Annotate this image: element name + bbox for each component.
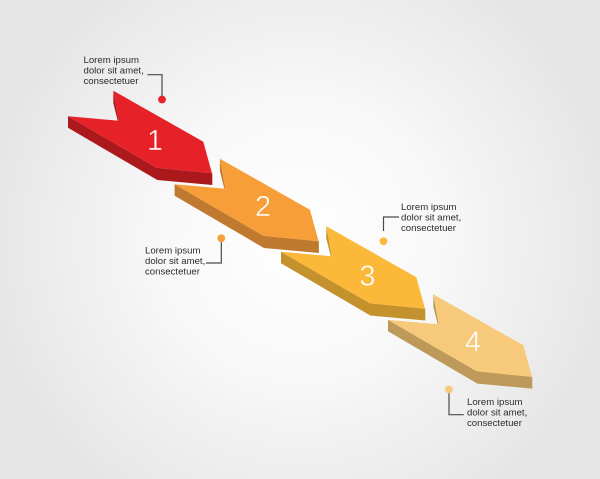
arrow 4 [388,294,532,389]
callout 1: dolor sit amet, [84,66,144,76]
callout 4: Lorem ipsum [467,397,522,408]
callout 1: Lorem ipsum [84,55,139,66]
callout 2: Lorem ipsum [145,246,200,256]
callout 3: consectetuer [401,223,457,234]
callout 4: consectetuer [467,418,523,429]
callout 4: dolor sit amet, [467,408,527,418]
arrow 1 [68,91,212,185]
callout 2 [145,234,225,278]
number 1: 1 [147,125,163,157]
callout 1 [84,55,166,103]
callout 2: dolor sit amet, [145,256,205,267]
arrow 2 [175,159,319,253]
callout 4 [445,386,527,429]
callout 2: consectetuer [145,266,201,278]
callout 3 [380,202,461,245]
callout 1: consectetuer [84,76,139,87]
number 4: 4 [465,327,481,359]
arrow 3 [281,226,425,320]
callout 3: dolor sit amet, [401,212,461,224]
callout 3: Lorem ipsum [401,202,456,213]
number 2: 2 [255,191,271,223]
number 3: 3 [359,260,376,292]
